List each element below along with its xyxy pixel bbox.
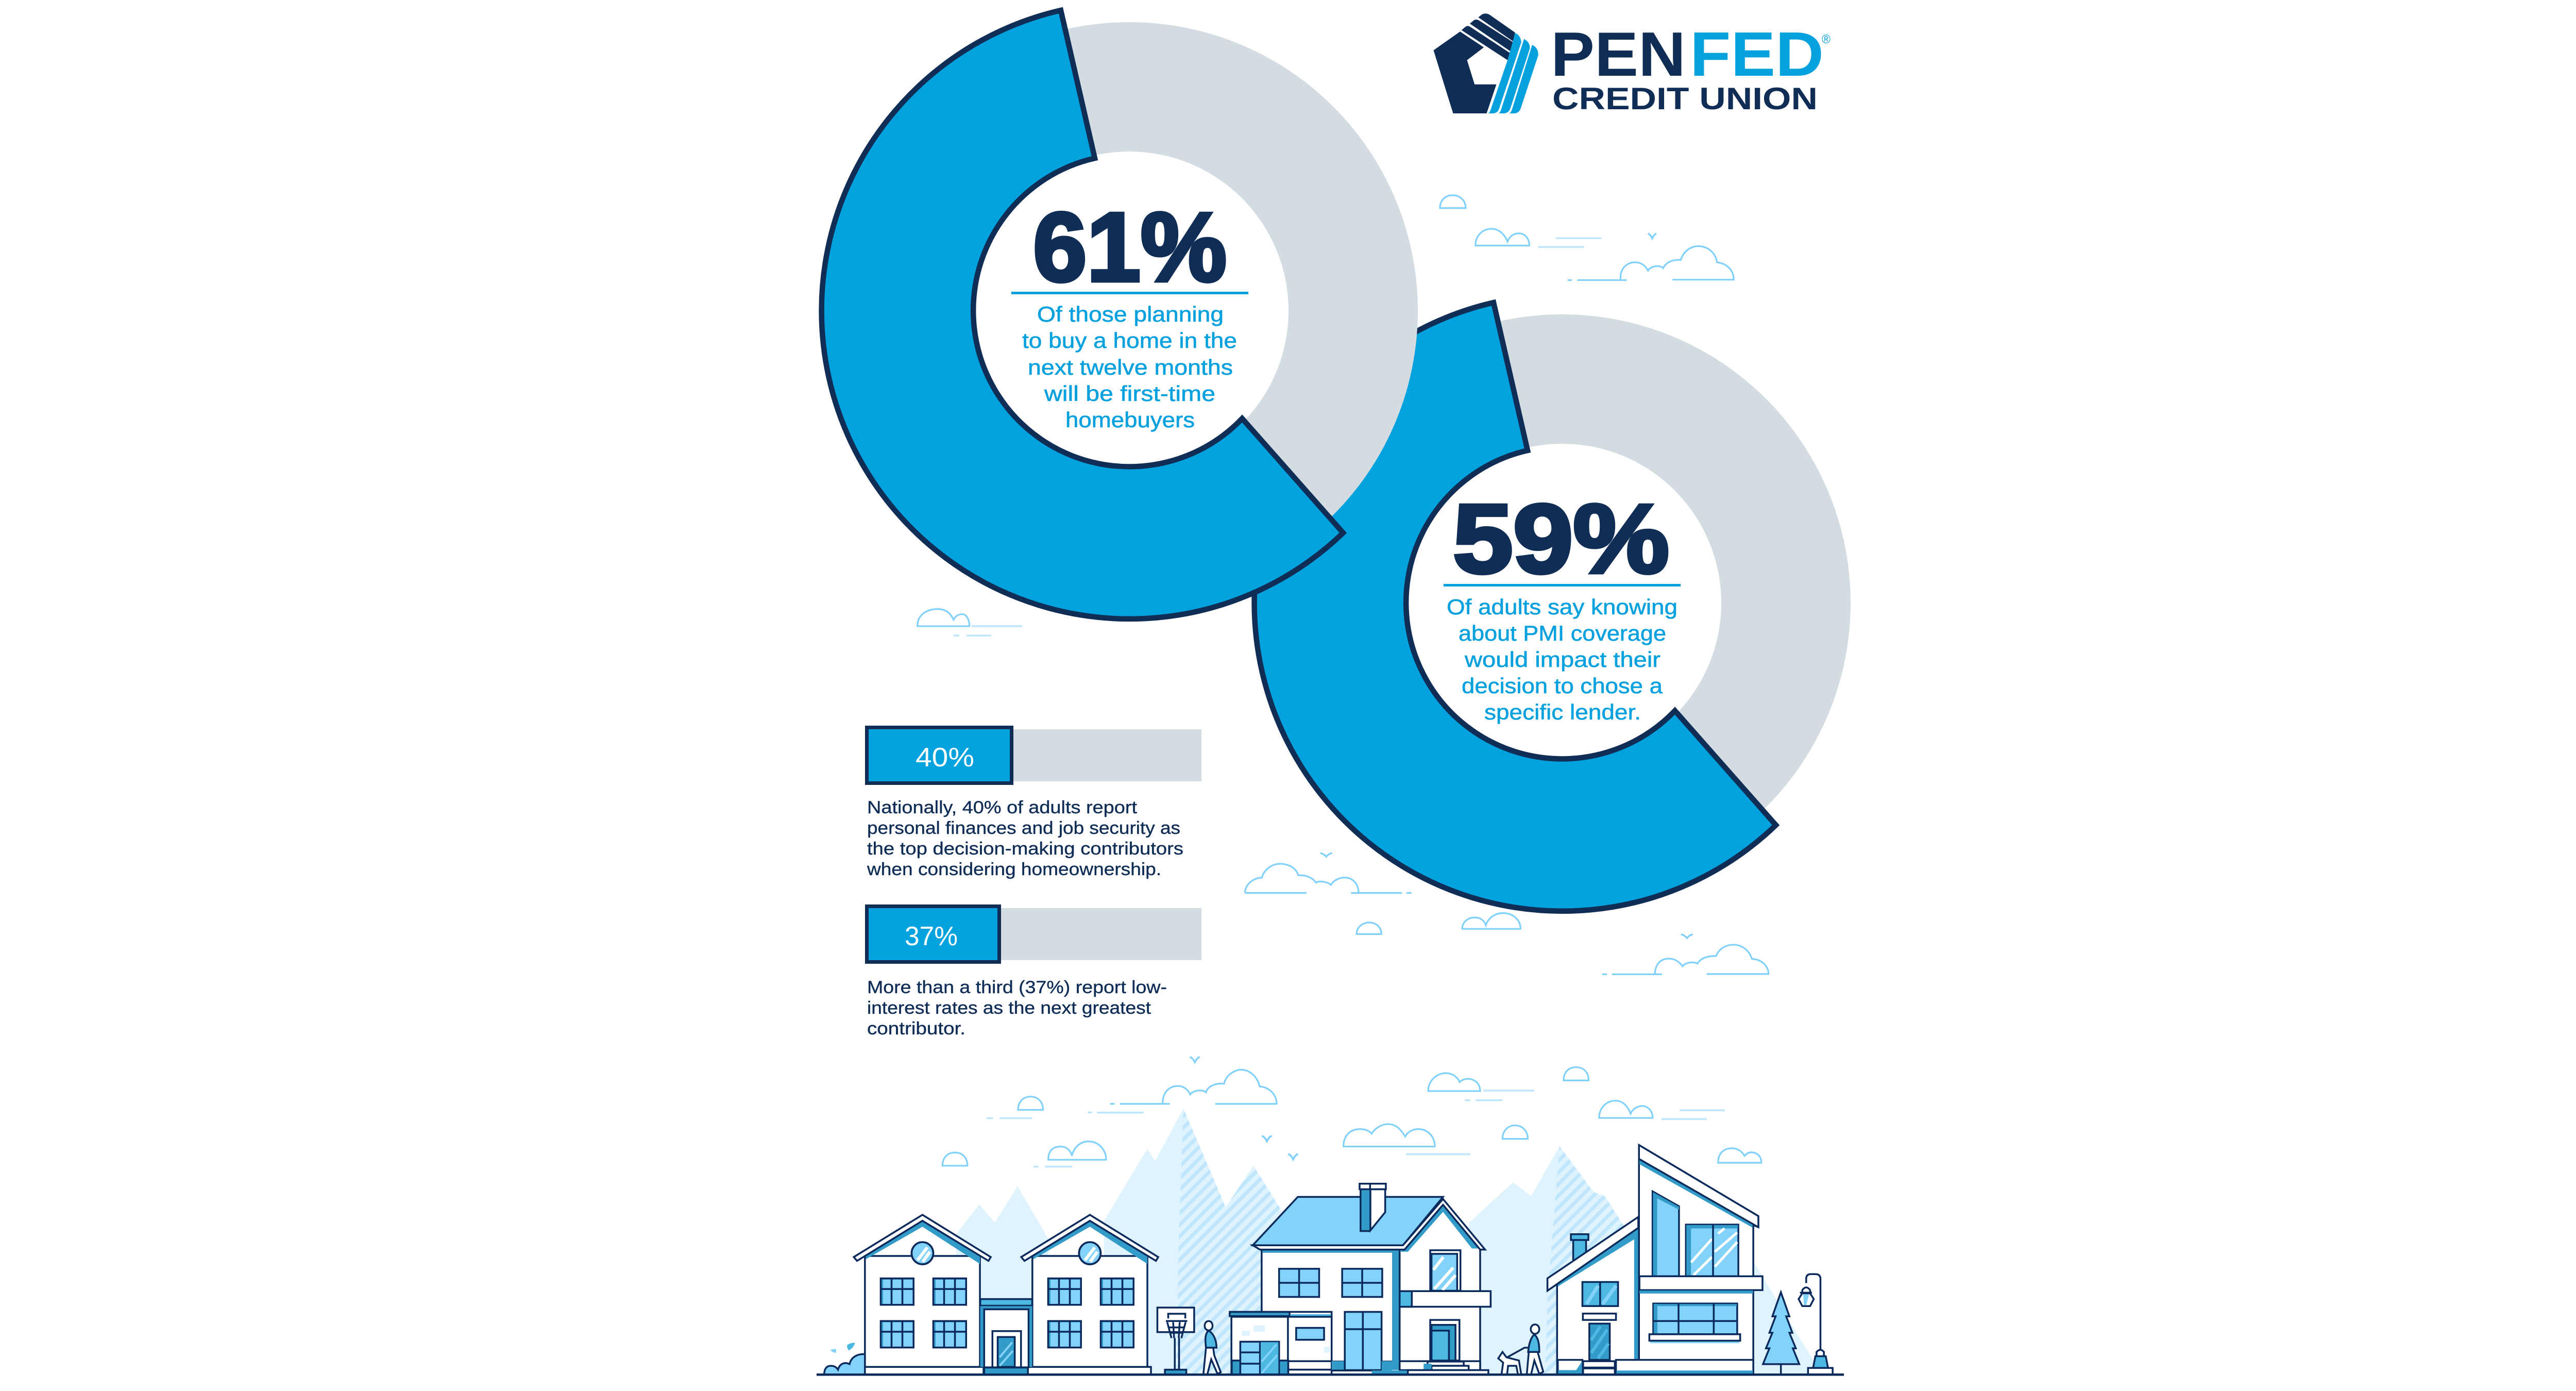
logo: PenFed Credit Union: PEN — [1551, 19, 1686, 89]
text: 40% description: when considering homeownership. — [867, 860, 1161, 879]
text: 37% description: More than a third (37%) report low- — [867, 978, 1167, 997]
stat text: 61% — [1011, 193, 1248, 432]
logo: PenFed Credit Union: ® — [1822, 32, 1831, 46]
bar: 37% — [866, 906, 1201, 962]
stat text: 59%: Of adults say knowing — [1447, 595, 1677, 619]
house 2 — [1021, 1215, 1158, 1375]
woman walking dog — [1498, 1325, 1543, 1375]
logo icon — [1434, 13, 1538, 113]
stat text: 59%: 59% — [1453, 484, 1669, 594]
person walking — [1204, 1321, 1221, 1375]
stat text: 61%: will be first-time — [1044, 381, 1215, 406]
text: 37% description: contributor. — [867, 1019, 965, 1038]
text: 40% description: Nationally, 40% of adults report — [867, 798, 1138, 817]
decorative clouds near logo — [1440, 195, 1734, 280]
cloud above modern house — [1718, 1148, 1761, 1163]
mountains behind the houses — [956, 1109, 1814, 1375]
street lamp — [1799, 1274, 1833, 1375]
donut chart: 61% — [822, 10, 1418, 619]
house 1 — [854, 1215, 991, 1375]
stat text: 61%: 61% — [1033, 193, 1227, 302]
cloud left of the bars — [918, 609, 1022, 635]
skyline clouds, right — [1262, 1067, 1725, 1160]
stat text: 61%: Of those planning — [1037, 302, 1224, 326]
stat text: 61%: to buy a home in the — [1022, 328, 1237, 353]
clouds below second donut — [1245, 853, 1769, 974]
logo: PenFed Credit Union: CREDIT UNION — [1552, 81, 1818, 116]
modern house 4 — [1548, 1145, 1762, 1375]
logo: PenFed Credit Union — [1434, 13, 1831, 116]
stat text: 59%: would impact their — [1464, 647, 1660, 672]
logo: PenFed Credit Union: FED — [1690, 19, 1824, 89]
house 3 — [1230, 1184, 1490, 1375]
bar: 40% — [866, 728, 1201, 783]
bar: 37%: 37% — [905, 921, 958, 951]
text: 40% description: the top decision-making contributors — [867, 839, 1183, 859]
stat text: 59%: decision to chose a — [1462, 674, 1663, 698]
text: 40% description — [867, 798, 1183, 879]
pine tree — [1763, 1292, 1799, 1375]
connector entrance between houses — [980, 1299, 1032, 1375]
donut chart: 59% — [1255, 303, 1851, 911]
stat text: 61%: next twelve months — [1028, 355, 1233, 379]
text: 37% description: interest rates as the next greatest — [867, 998, 1151, 1018]
stat text: 59%: specific lender. — [1484, 700, 1641, 724]
stat text: 59%: about PMI coverage — [1459, 621, 1666, 645]
text: 37% description — [867, 978, 1167, 1038]
stat text: 61%: homebuyers — [1065, 408, 1195, 432]
stat text: 59% — [1444, 484, 1681, 724]
ground line — [817, 1373, 1844, 1376]
skyline clouds and birds, left — [942, 1057, 1298, 1167]
basketball hoop — [1157, 1308, 1194, 1375]
text: 40% description: personal finances and job security as — [867, 818, 1180, 838]
bush — [824, 1343, 865, 1375]
bar: 40%: 40% — [916, 743, 974, 773]
